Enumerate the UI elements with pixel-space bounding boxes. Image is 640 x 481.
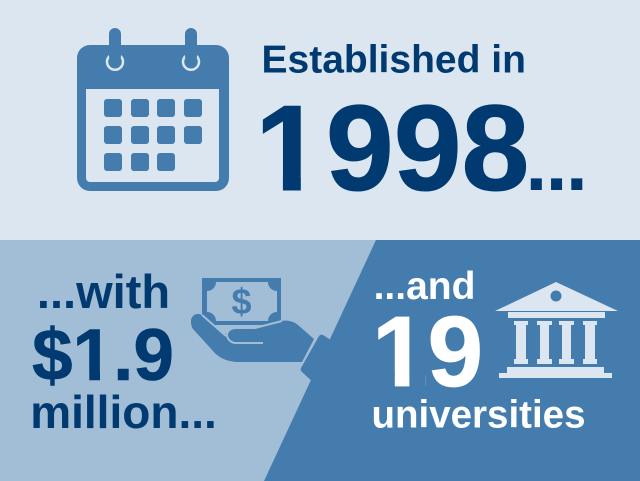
panel: bottom right universities — [264, 240, 640, 481]
ellipsis after 1998: ... — [526, 119, 586, 207]
text: universities: universities — [372, 394, 586, 436]
big number: 1.9 million dollars: $1.9 — [32, 315, 174, 396]
big number: 1998: 1998 — [255, 80, 529, 216]
icon: hand holding money — [190, 278, 334, 385]
text: with: ...with — [37, 265, 170, 318]
panel: top established — [0, 0, 640, 240]
big number: 19: 19 — [372, 296, 483, 408]
icon: university building — [495, 282, 618, 378]
icon: hand holding money: $ — [231, 281, 252, 322]
icon: calendar — [77, 28, 229, 191]
panel: bottom left funding — [0, 240, 640, 481]
heading: established in: Established in — [262, 38, 526, 82]
text: and: ...and — [374, 265, 475, 308]
text: million: million... — [30, 386, 217, 438]
